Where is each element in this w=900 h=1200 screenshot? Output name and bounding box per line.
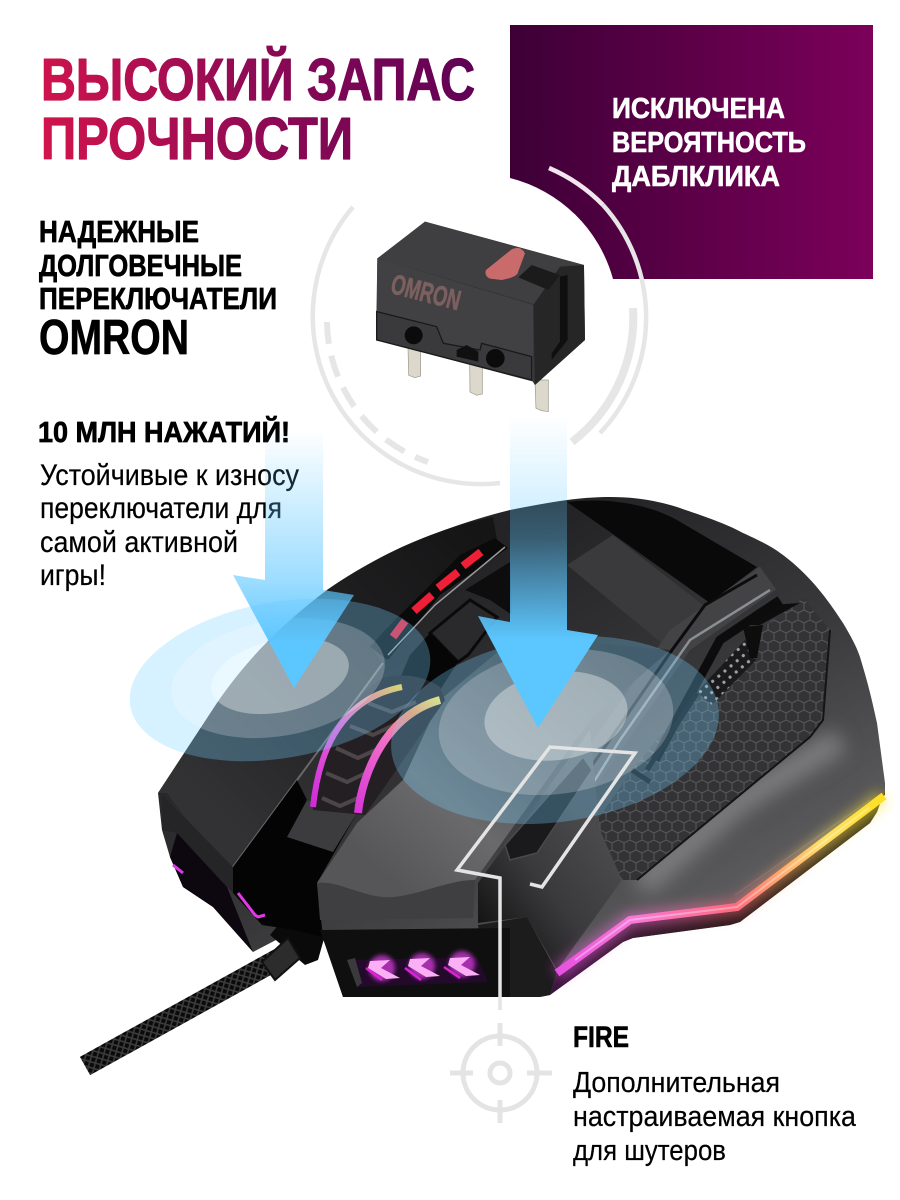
front vent with chevrons bbox=[320, 928, 510, 997]
decorative ring arcs around switch bbox=[313, 168, 646, 484]
heading: omron switches: НАДЕЖНЫЕ bbox=[39, 214, 199, 249]
gaming mouse bbox=[85, 497, 885, 1066]
switch logo: OMRON bbox=[388, 268, 464, 316]
text: fire button: FIRE bbox=[573, 1021, 629, 1054]
press ripple right bbox=[379, 616, 731, 844]
right button bbox=[317, 640, 670, 897]
arrow left bbox=[233, 432, 354, 688]
text: 10 million clicks: самой активной bbox=[40, 526, 238, 559]
arrow right bbox=[478, 415, 598, 728]
heading: omron switches bbox=[39, 214, 277, 365]
perforated side mesh bbox=[697, 640, 756, 705]
callout text: ДАБЛКЛИКА bbox=[612, 161, 780, 193]
text: fire button: настраиваемая кнопка bbox=[573, 1101, 857, 1133]
purple callout panel bbox=[510, 25, 873, 279]
text: 10 million clicks: игры! bbox=[40, 559, 106, 592]
LED dpi indicators bbox=[393, 552, 481, 637]
black glossy band bbox=[567, 501, 757, 603]
left button lip bbox=[162, 795, 233, 893]
left button front edge bbox=[233, 663, 383, 867]
callout text: ВЕРОЯТНОСТЬ bbox=[612, 127, 806, 159]
mouse body bbox=[158, 497, 885, 997]
icon: crosshair target bbox=[450, 1023, 552, 1123]
callout text bbox=[612, 93, 806, 193]
switch pins bbox=[408, 347, 548, 412]
heading: omron switches: ДОЛГОВЕЧНЫЕ bbox=[39, 248, 242, 283]
side thumb slot bbox=[632, 693, 697, 782]
omron microswitch bbox=[376, 222, 585, 412]
heading: omron switches: ПЕРЕКЛЮЧАТЕЛИ bbox=[39, 281, 277, 316]
title bbox=[41, 46, 475, 172]
title: ПРОЧНОСТИ bbox=[41, 106, 353, 172]
rgb strip with glow bbox=[557, 796, 884, 973]
cable strain relief bbox=[262, 905, 325, 980]
lower left base bbox=[170, 833, 253, 952]
text: fire button: Дополнительная bbox=[573, 1067, 780, 1099]
top panel bbox=[567, 535, 703, 650]
text: fire button: для шутеров bbox=[573, 1135, 726, 1167]
text: 10 million clicks: переключатели для bbox=[40, 492, 282, 525]
text: 10 million clicks: Устойчивые к износу bbox=[40, 459, 299, 492]
title: ВЫСОКИЙ ЗАПАС bbox=[41, 46, 475, 113]
heading: omron switches: OMRON bbox=[39, 311, 189, 365]
left side accents bbox=[173, 865, 265, 917]
text: fire button bbox=[573, 1021, 857, 1167]
press ripple left bbox=[117, 577, 443, 783]
fire button outline and leader bbox=[457, 747, 635, 1010]
scroll wheel bbox=[313, 675, 445, 815]
wheel well piece bbox=[287, 800, 357, 852]
led rail bbox=[370, 538, 508, 660]
text: 10 million clicks bbox=[38, 415, 299, 592]
side corner bbox=[478, 917, 557, 997]
braided cable bbox=[85, 958, 280, 1066]
side spike bbox=[743, 603, 800, 658]
honeycomb side grip bbox=[590, 598, 830, 880]
left button bbox=[158, 517, 498, 867]
glossy curved strip bbox=[530, 575, 780, 870]
dark inner area bbox=[233, 780, 357, 937]
switch body bbox=[377, 222, 585, 385]
text: 10 million clicks: 10 МЛН НАЖАТИЙ! bbox=[38, 415, 290, 449]
fire button bbox=[505, 757, 592, 860]
callout text: ИСКЛЮЧЕНА bbox=[612, 93, 785, 125]
switch plunger bbox=[485, 248, 525, 280]
center top buttons bbox=[395, 562, 512, 690]
metallic side highlight bbox=[640, 740, 870, 895]
lower lit underside bbox=[550, 790, 885, 995]
center side wedge bbox=[478, 730, 622, 970]
right button lip bbox=[317, 880, 475, 920]
